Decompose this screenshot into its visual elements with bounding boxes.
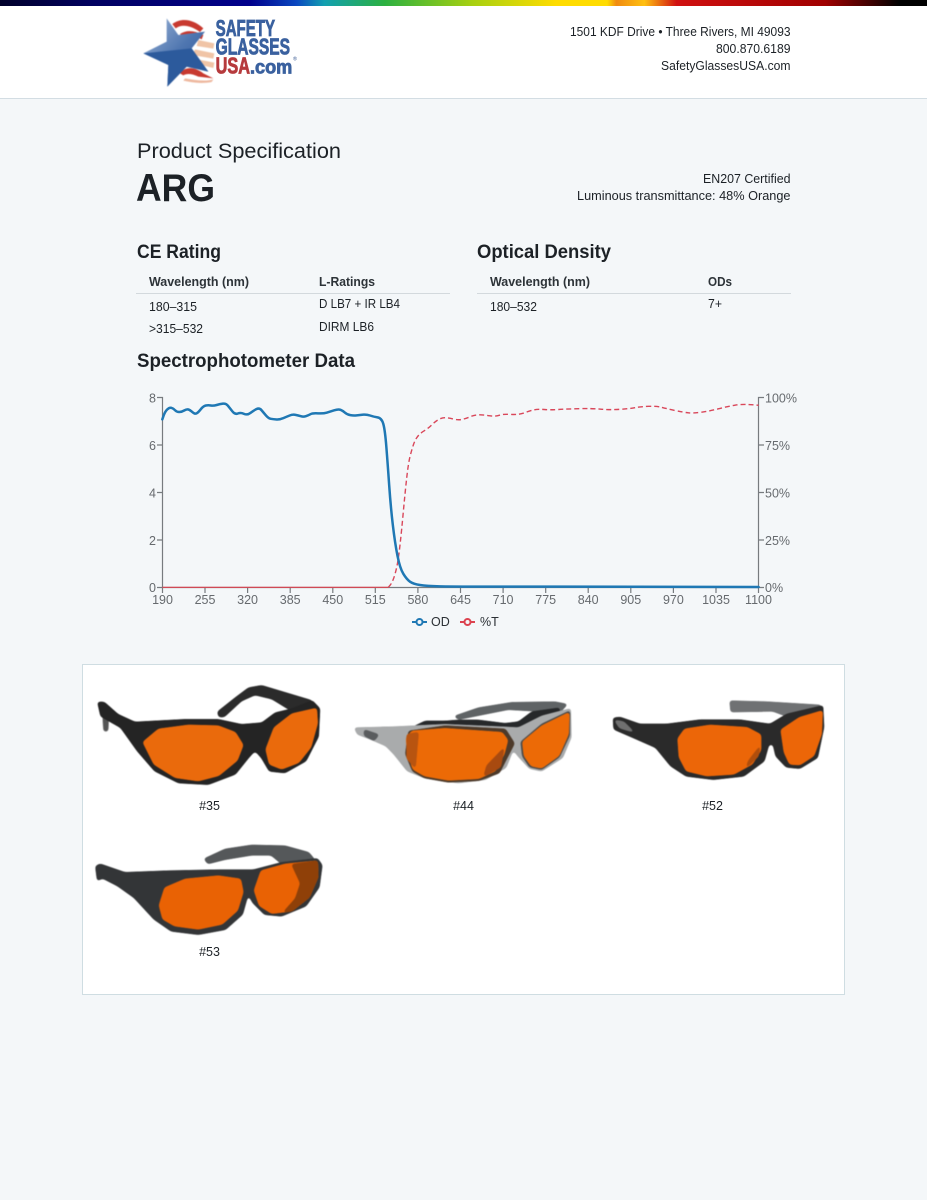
panel: CE rating: >315–532 bbox=[149, 321, 203, 336]
x axis labels: wavelength: 190 bbox=[152, 593, 173, 607]
panel: optical density bbox=[477, 242, 791, 314]
glasses frame #52 bbox=[613, 700, 824, 813]
logo wordmark: SAFETY bbox=[216, 15, 275, 41]
contact details bbox=[570, 24, 790, 73]
glasses frame #44 bbox=[354, 701, 572, 813]
left axis labels: OD: 4 bbox=[149, 486, 156, 500]
label #44: #44 bbox=[453, 799, 474, 813]
x axis labels: wavelength: 1100 bbox=[745, 593, 772, 607]
panel: optical density: 7+ bbox=[708, 296, 722, 311]
x axis labels: wavelength: 905 bbox=[620, 593, 641, 607]
contact details: 800.870.6189 bbox=[716, 41, 790, 56]
title block: Product Specification bbox=[137, 140, 341, 163]
panel: optical density: 180–532 bbox=[490, 299, 537, 314]
title block: ARG bbox=[136, 167, 215, 210]
x axis labels: wavelength: 385 bbox=[280, 593, 301, 607]
chart legend: OD bbox=[431, 615, 450, 629]
heading: spectrophotometer data: Spectrophotometer Data bbox=[137, 351, 355, 372]
label #53: #53 bbox=[199, 945, 220, 959]
spectrophotometer line chart bbox=[149, 392, 797, 629]
panel: CE rating: L-Ratings bbox=[319, 274, 375, 289]
logo wordmark: .com bbox=[250, 57, 292, 78]
x axis labels: wavelength: 255 bbox=[195, 593, 215, 607]
certification note bbox=[577, 171, 790, 203]
glasses frame #35 bbox=[97, 685, 320, 813]
right axis labels: percent transmittance: 25% bbox=[765, 534, 790, 548]
x axis labels: wavelength: 320 bbox=[237, 593, 258, 607]
chart legend: %T bbox=[480, 615, 499, 629]
rainbow spectrum bar bbox=[0, 0, 927, 6]
x axis labels: wavelength: 710 bbox=[493, 593, 514, 607]
left axis labels: OD: 2 bbox=[149, 534, 156, 548]
x axis labels: wavelength: 580 bbox=[407, 593, 428, 607]
certification note: EN207 Certified bbox=[703, 171, 790, 186]
left axis labels: OD: 0 bbox=[149, 581, 156, 595]
x axis labels: wavelength: 1035 bbox=[702, 593, 730, 607]
chart axes bbox=[157, 398, 764, 593]
chart legend bbox=[412, 615, 499, 629]
series: percent transmittance bbox=[162, 404, 759, 587]
x axis labels: wavelength: 840 bbox=[578, 593, 599, 607]
panel: CE rating: 180–315 bbox=[149, 299, 197, 314]
panel: CE rating: D LB7 + IR LB4 bbox=[319, 296, 400, 311]
x axis labels: wavelength: 450 bbox=[322, 593, 343, 607]
x axis labels: wavelength bbox=[152, 593, 772, 607]
left axis labels: OD: 6 bbox=[149, 439, 156, 453]
logo wordmark: ® bbox=[293, 56, 297, 63]
x axis labels: wavelength: 515 bbox=[365, 593, 386, 607]
logo wordmark: USA bbox=[216, 52, 250, 78]
label #35: #35 bbox=[199, 799, 220, 813]
panel: optical density: Wavelength (nm) bbox=[490, 274, 590, 289]
panel: CE rating: Wavelength (nm) bbox=[149, 274, 249, 289]
contact details: 1501 KDF Drive • Three Rivers, MI 49093 bbox=[570, 24, 790, 39]
label #52: #52 bbox=[702, 799, 723, 813]
series: optical density bbox=[162, 404, 759, 587]
panel: optical density: ODs bbox=[708, 274, 732, 289]
right axis labels: percent transmittance: 75% bbox=[765, 439, 790, 453]
logo: Safety Glasses USA bbox=[143, 15, 297, 87]
contact details: SafetyGlassesUSA.com bbox=[661, 58, 790, 73]
certification note: Luminous transmittance: 48% Orange bbox=[577, 188, 790, 203]
panel: CE rating bbox=[136, 242, 450, 336]
right axis labels: percent transmittance: 0% bbox=[765, 581, 783, 595]
right axis labels: percent transmittance: 50% bbox=[765, 486, 790, 500]
logo wordmark bbox=[216, 15, 297, 78]
right axis labels: percent transmittance bbox=[765, 392, 797, 595]
x axis labels: wavelength: 970 bbox=[663, 593, 684, 607]
header bbox=[0, 0, 927, 99]
panel: CE rating: DIRM LB6 bbox=[319, 319, 374, 334]
panel: available frames bbox=[82, 664, 844, 994]
left axis labels: OD: 8 bbox=[149, 392, 156, 406]
left axis labels: OD bbox=[149, 392, 156, 595]
right axis labels: percent transmittance: 100% bbox=[765, 392, 797, 406]
panel: optical density: Optical Density bbox=[477, 242, 611, 263]
x axis labels: wavelength: 645 bbox=[450, 593, 471, 607]
panel: CE rating: CE Rating bbox=[137, 242, 221, 263]
title block bbox=[136, 140, 341, 210]
x axis labels: wavelength: 775 bbox=[535, 593, 556, 607]
logo wordmark: GLASSES bbox=[216, 34, 290, 60]
glasses frame #53 bbox=[95, 845, 323, 959]
